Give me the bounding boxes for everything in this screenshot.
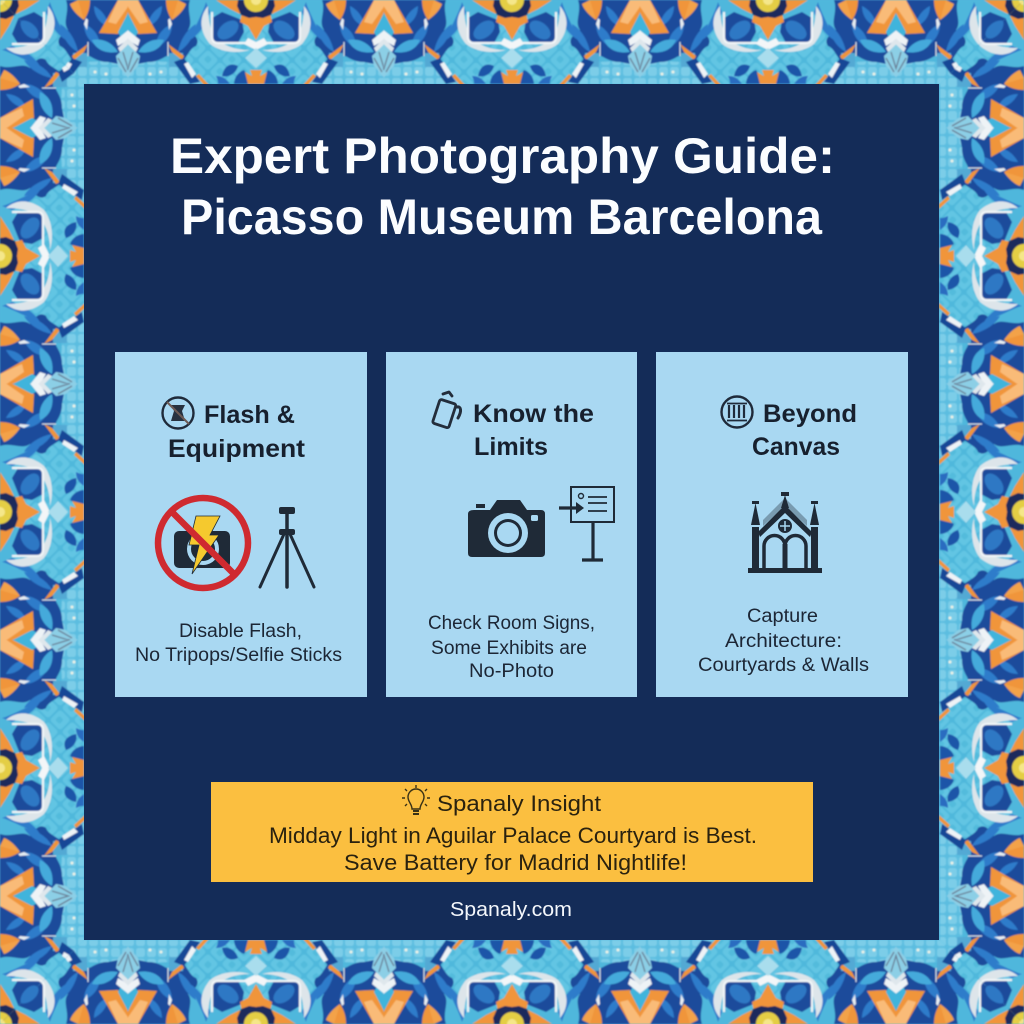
panel: know the limits (386, 352, 637, 697)
panel: flash and equipment (115, 352, 367, 697)
title: Picasso Museum Barcelona (181, 189, 823, 245)
text: limits advice: No-Photo (469, 661, 554, 682)
text: insight: Midday Light in Aguilar Palace Courtyard is Best. (269, 823, 757, 848)
heading: know the limits: Limits (474, 433, 548, 461)
icon: camera (468, 500, 545, 557)
heading: know the limits: Know the (473, 400, 594, 428)
icon: crossed flash circle (162, 398, 194, 428)
text: architecture advice (698, 606, 869, 676)
title: Expert Photography Guide: (170, 128, 835, 184)
text: insight (269, 791, 757, 875)
panel: beyond canvas (656, 352, 908, 697)
heading: flash and equipment: Flash & (204, 401, 295, 429)
text: flash advice: Disable Flash, (179, 621, 302, 642)
icon: no flash camera (158, 498, 248, 588)
text: insight: Spanaly Insight (437, 791, 601, 816)
heading: flash and equipment (168, 401, 306, 463)
callout: spanaly insight (211, 782, 813, 882)
heading: flash and equipment: Equipment (168, 435, 306, 463)
text: flash advice: No Tripops/Selfie Sticks (135, 645, 342, 666)
icon: columns circle (722, 396, 752, 428)
icon: tripod (260, 507, 314, 587)
heading: beyond canvas: Canvas (752, 433, 840, 461)
title (170, 128, 835, 245)
text: architecture advice: Architecture: (725, 631, 842, 652)
text: architecture advice: Capture (747, 606, 818, 627)
text: insight: Save Battery for Madrid Nightlife! (344, 850, 687, 875)
footer url: Spanaly.com (450, 899, 572, 921)
text: architecture advice: Courtyards & Walls (698, 655, 869, 676)
text: flash advice (135, 621, 342, 666)
text: limits advice: Some Exhibits are (431, 638, 587, 659)
icon: tilted phone (432, 392, 461, 428)
icon: light bulb (402, 785, 430, 814)
text: limits advice (428, 613, 595, 682)
navy main panel (84, 84, 939, 940)
heading: beyond canvas (752, 400, 857, 461)
icon: gothic building (748, 492, 822, 573)
text: limits advice: Check Room Signs, (428, 613, 595, 634)
icon: sign with arrow (559, 487, 614, 560)
heading: know the limits (473, 400, 594, 461)
heading: beyond canvas: Beyond (763, 400, 857, 428)
